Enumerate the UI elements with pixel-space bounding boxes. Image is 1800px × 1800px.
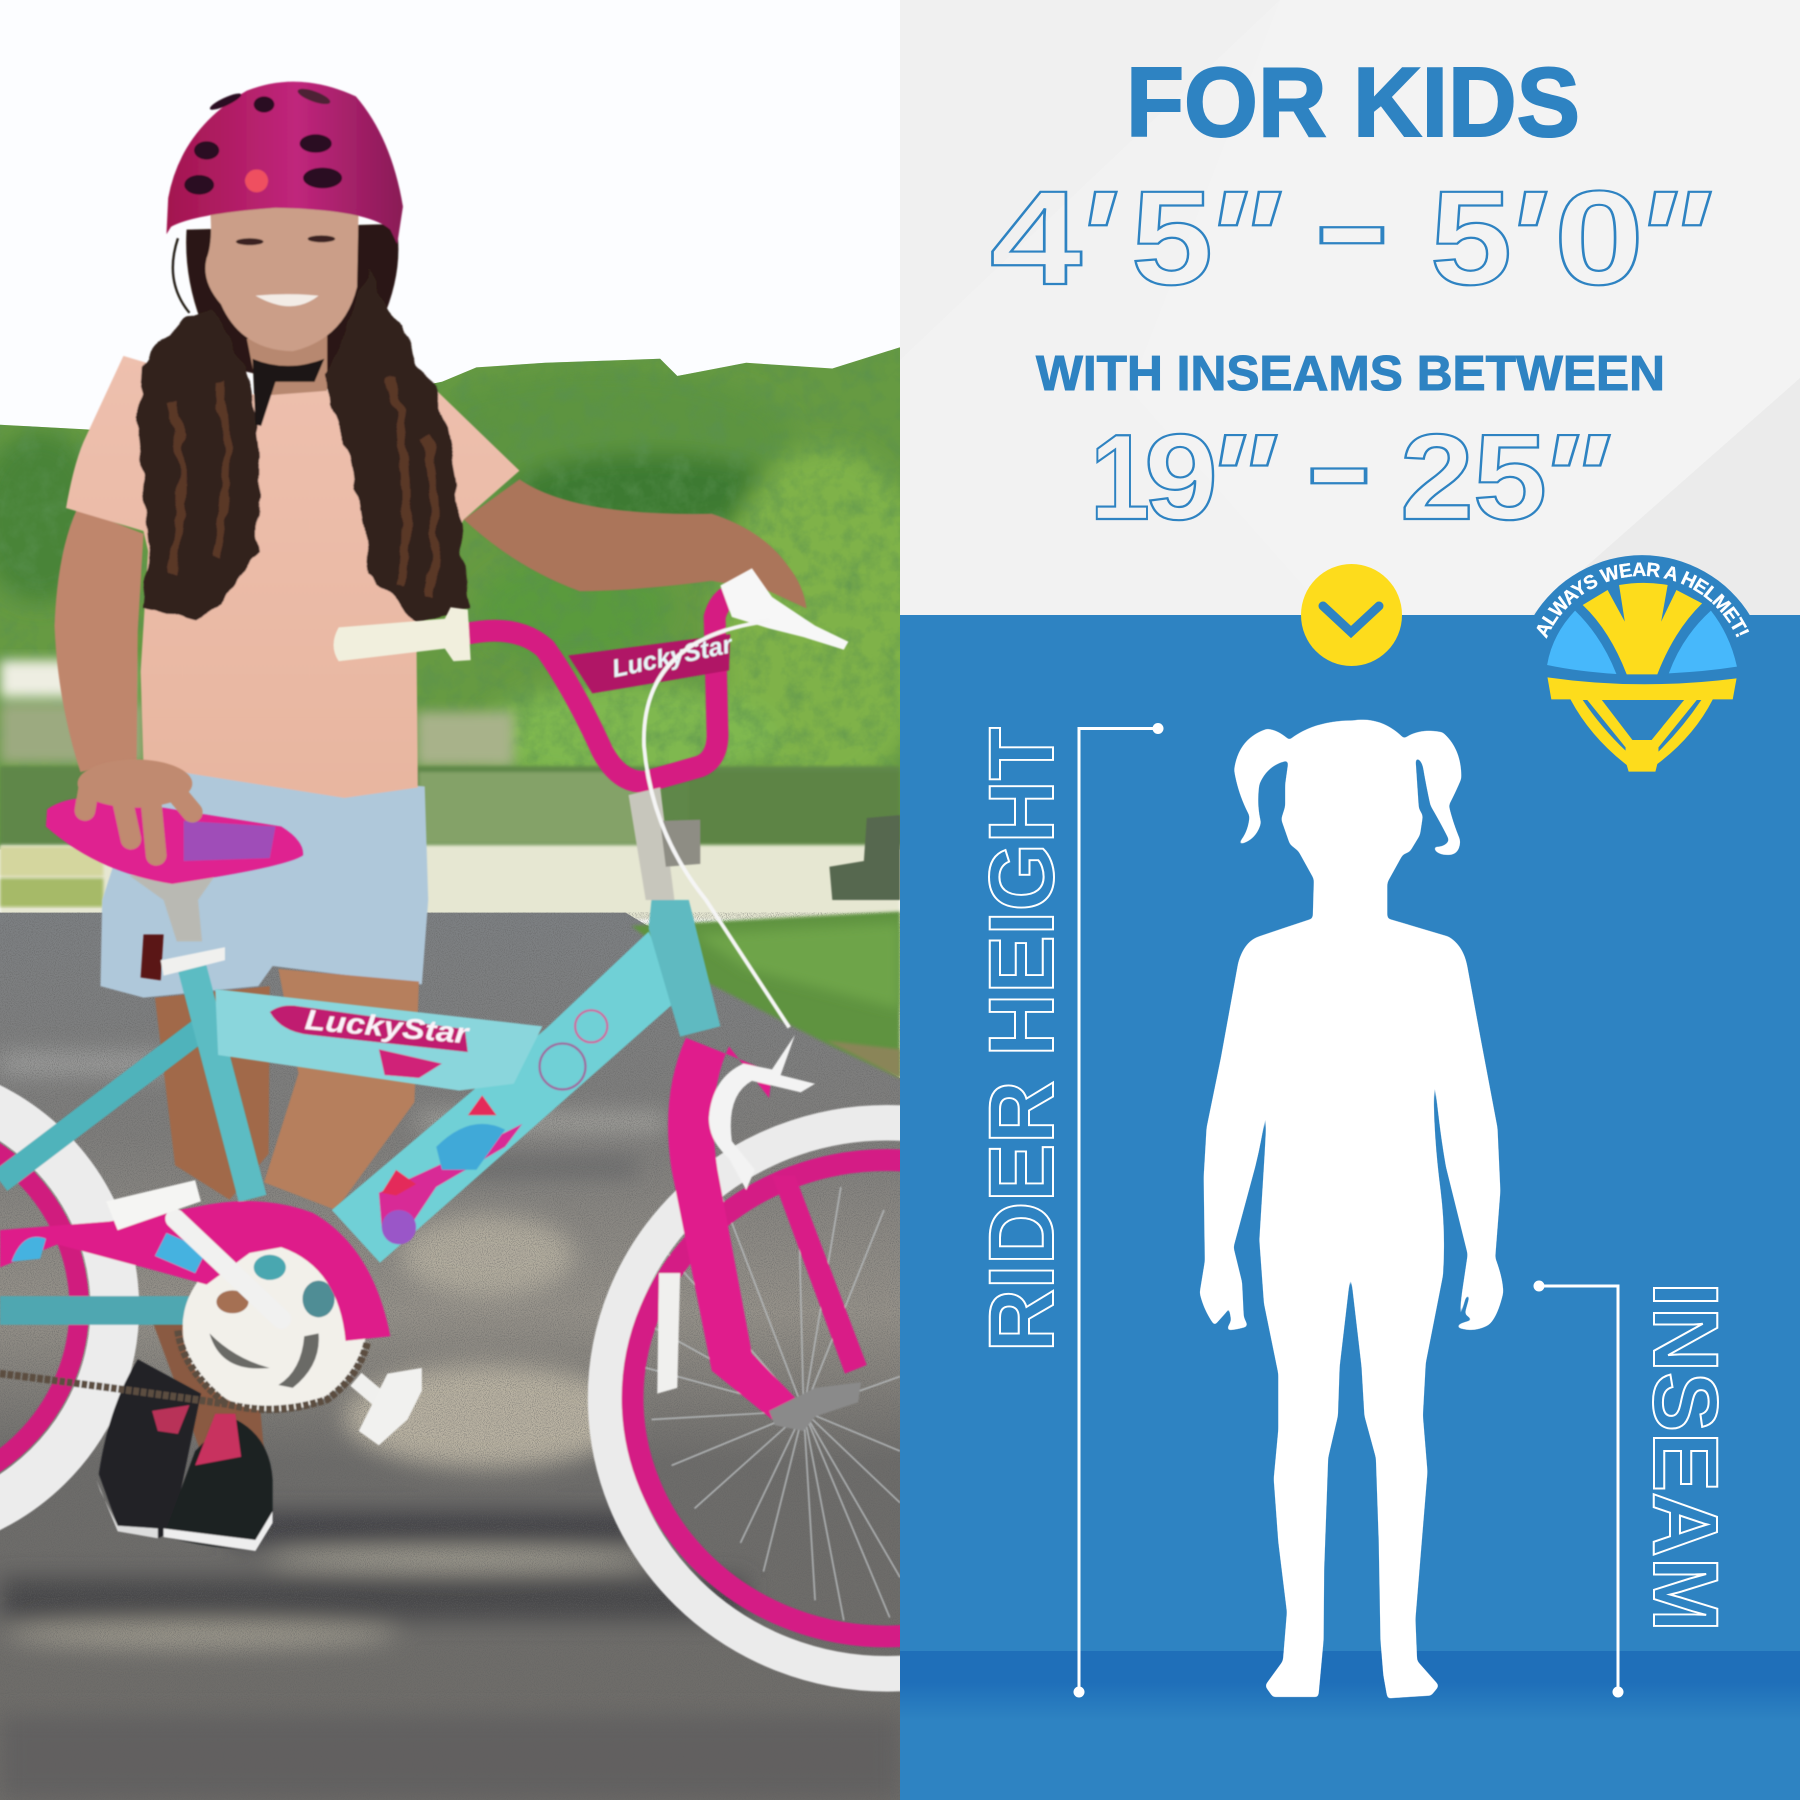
- chain guard: [0, 1201, 390, 1341]
- far arm: [55, 508, 144, 772]
- hair behind head: [186, 224, 402, 390]
- crossbar pad: [568, 630, 736, 693]
- frame logo: LuckyStar: [304, 1004, 472, 1051]
- icon: down chevron badge: [1301, 564, 1402, 666]
- fork rear leg: [772, 1176, 867, 1374]
- height range: 0: [1554, 164, 1644, 313]
- smile: [255, 294, 319, 306]
- inseam range: 2: [1400, 409, 1474, 545]
- rear wheel tyre: [0, 1083, 115, 1533]
- height range: ": [1202, 164, 1281, 313]
- helmet drawing: [1547, 583, 1737, 772]
- inseam range: 5: [1473, 409, 1547, 545]
- crossbar pad: LuckyStar: [610, 630, 736, 683]
- brake cable: [644, 621, 789, 1027]
- eyes: [236, 238, 263, 245]
- inseam measure line: [1534, 1280, 1624, 1698]
- lower half: [0, 912, 900, 1800]
- height range: 5: [1131, 164, 1213, 313]
- front wheel spokes: [646, 1176, 900, 1620]
- handlebar: [465, 591, 743, 782]
- height range: ': [1504, 164, 1547, 313]
- front hub: [769, 1382, 861, 1431]
- seat stay: [0, 1029, 201, 1181]
- inseam range: 9: [1144, 409, 1218, 545]
- neck: [247, 327, 327, 396]
- sky: [0, 0, 900, 574]
- hair: [138, 270, 466, 625]
- subheading: with inseams between: WITH INSEAMS BETWEEN: [1036, 347, 1665, 401]
- label: inseam: INSEAM: [1634, 1282, 1736, 1632]
- pond and far shore: [0, 660, 514, 766]
- hand on seat: [77, 759, 192, 855]
- panel: bike photo: [0, 80, 900, 1800]
- shorts: [100, 763, 428, 998]
- inseam range: ": [1204, 409, 1278, 545]
- top tube: [215, 989, 542, 1091]
- lower pedal: [359, 1368, 422, 1445]
- stem: [629, 788, 674, 900]
- spoke reflector: [657, 1273, 680, 1394]
- fork: [668, 1038, 802, 1420]
- seat decoration: [184, 821, 276, 861]
- height range: 4: [990, 164, 1082, 313]
- badge arc background: [1533, 555, 1751, 617]
- background trees: [0, 344, 936, 861]
- seat: [46, 798, 303, 884]
- down tube graphics: [379, 1010, 607, 1244]
- inseam range: -: [1304, 397, 1374, 535]
- figure: child silhouette: [1200, 720, 1503, 1698]
- guard graphics: [11, 1233, 207, 1273]
- height range: 5: [1430, 164, 1512, 313]
- near arm: [464, 479, 806, 608]
- height range: ": [1632, 164, 1711, 313]
- shoes: [99, 1359, 201, 1538]
- seat post: [129, 875, 215, 941]
- down tube: [332, 932, 680, 1263]
- shirt: [66, 356, 519, 798]
- asphalt path: [0, 913, 900, 1800]
- floor band: [900, 1651, 1800, 1721]
- lawn and path: [0, 845, 900, 920]
- heading: for kids: FOR KIDS: [1126, 47, 1580, 157]
- panel: blue rider diagram: [900, 615, 1800, 1800]
- seat clamp and reflector: [141, 934, 225, 980]
- rider height measure line: [1074, 723, 1164, 1698]
- head tube: [649, 900, 720, 1037]
- inseam range: [1090, 397, 1611, 545]
- inseam range: ": [1537, 409, 1611, 545]
- grass verge: [631, 912, 900, 1078]
- helmet: [166, 82, 403, 244]
- loose strap: [173, 238, 189, 313]
- lower crank: [356, 1379, 393, 1411]
- height range: [990, 150, 1711, 313]
- frame logo: [270, 1004, 472, 1078]
- chain stay: [0, 1296, 247, 1325]
- legs: [264, 969, 419, 1210]
- icon: always wear a helmet badge: [1534, 555, 1750, 772]
- inseam range: 1: [1090, 409, 1150, 545]
- top pedal: [106, 1180, 201, 1230]
- panel: sizing header background: [900, 0, 1800, 616]
- crank arm: [175, 1219, 281, 1319]
- girl: [55, 82, 806, 1452]
- brake caliper: [709, 1035, 815, 1190]
- grip: [333, 607, 471, 661]
- seat tube: [189, 957, 253, 1199]
- height range: -: [1312, 150, 1392, 299]
- brake lever: [720, 568, 848, 650]
- chain ring: [183, 1244, 366, 1411]
- chain: [0, 1331, 367, 1409]
- rear wheel rim: [0, 1118, 79, 1497]
- bicycle: [0, 568, 1168, 1674]
- label: rider height: RIDER HEIGHT: [971, 727, 1073, 1352]
- front wheel rim: [633, 1160, 1141, 1636]
- fence and reeds: [0, 766, 900, 847]
- badge text: ALWAYS WEAR A HELMET!: [1536, 562, 1750, 639]
- helmet strap: [253, 359, 324, 426]
- front wheel tyre: [606, 1123, 1168, 1674]
- height range: ': [1074, 164, 1117, 313]
- face: [205, 201, 359, 351]
- park bench: [829, 815, 900, 900]
